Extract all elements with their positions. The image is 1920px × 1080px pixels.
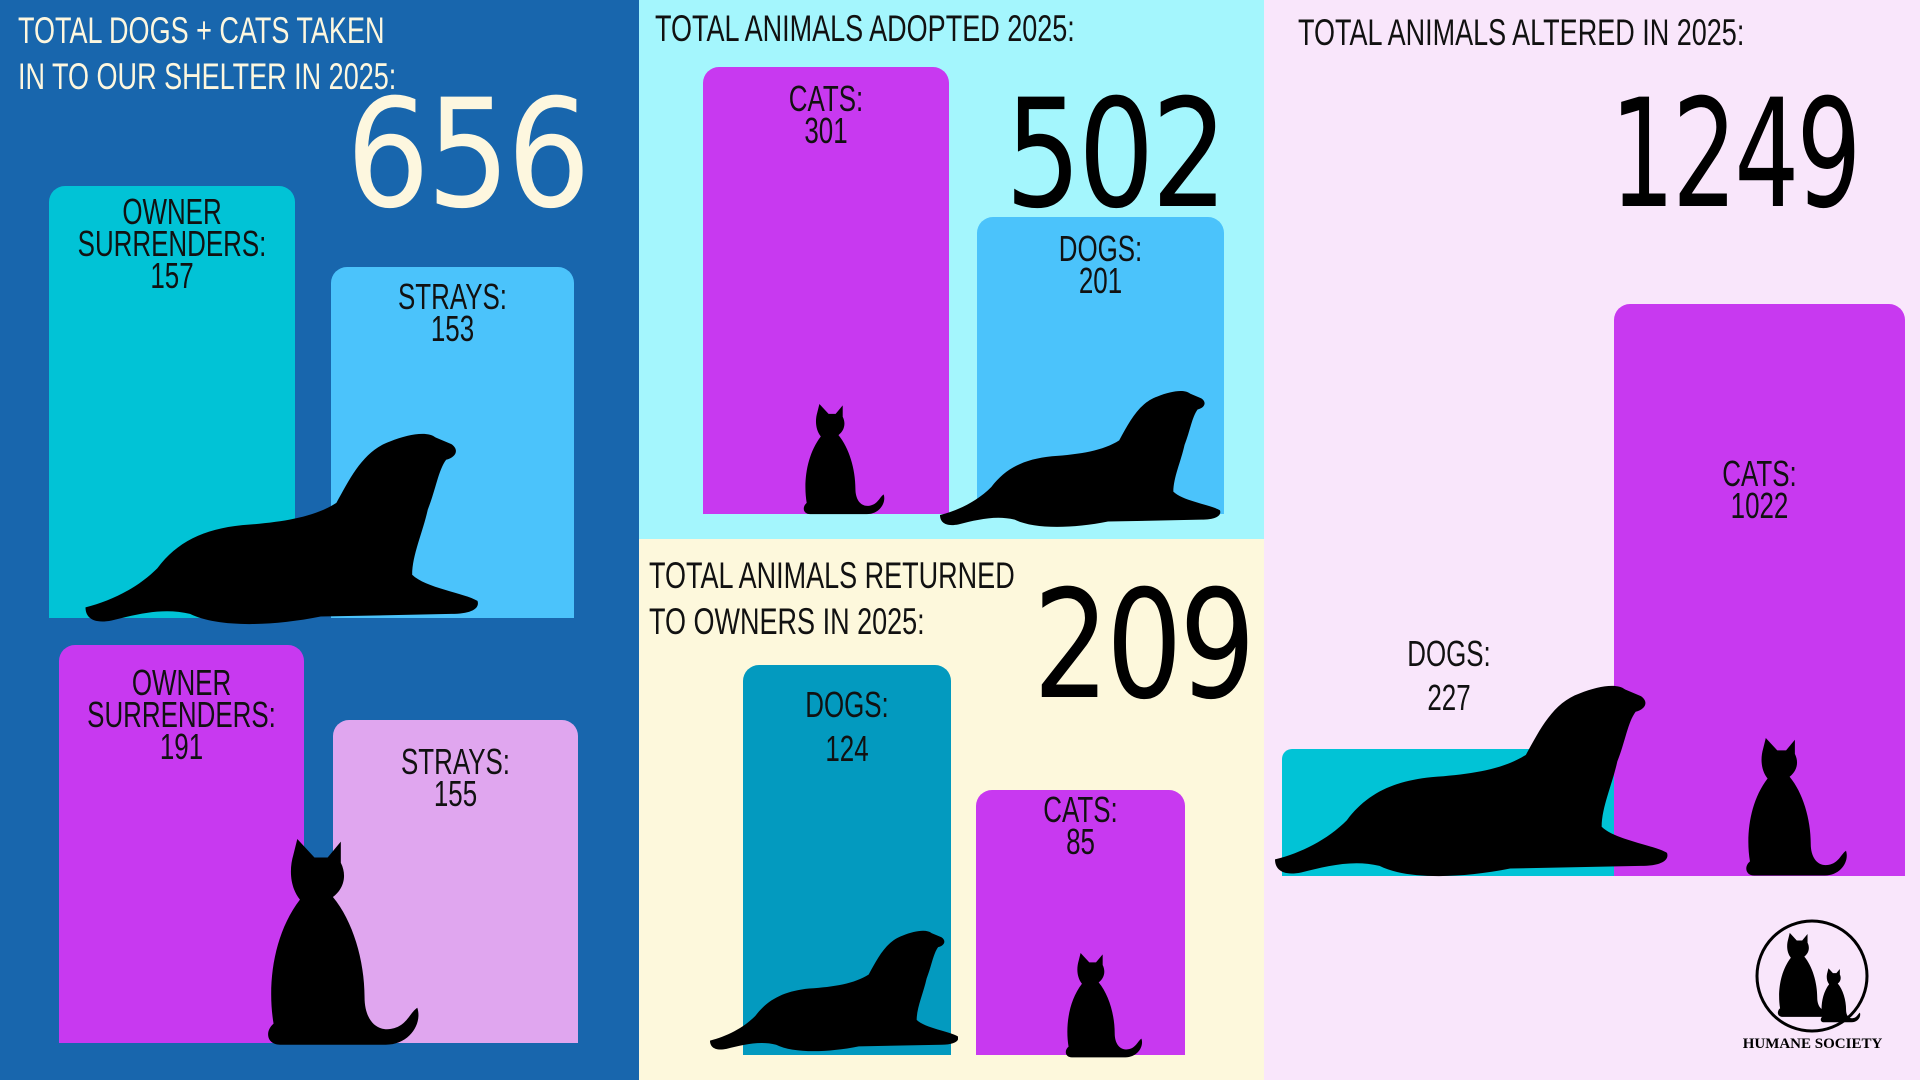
altered total: 1249: [1610, 68, 1859, 242]
bar: dog owner surrenders: 157: [150, 255, 194, 296]
icon: cat: [268, 839, 418, 1045]
panel: intake: [0, 0, 639, 1080]
bar: adopted dogs: DOGS:: [1059, 228, 1142, 269]
bar: dog owner surrenders: OWNER: [122, 191, 222, 232]
label: altered dogs: [1407, 633, 1491, 718]
intake total: 656: [346, 68, 587, 242]
bar: adopted cats: 301: [804, 110, 848, 151]
panel: adopted: [639, 0, 1264, 539]
bar: dog strays: 153: [431, 308, 474, 349]
bar: dog owner surrenders: SURRENDERS:: [78, 223, 266, 264]
bar: dog strays: [331, 267, 574, 618]
icon: cat: [804, 404, 884, 514]
bar: returned dogs: 124: [825, 728, 869, 769]
intake title: [18, 10, 396, 97]
adopted title: TOTAL ANIMALS ADOPTED 2025:: [655, 8, 1075, 49]
bar: cat strays: STRAYS:: [401, 741, 510, 782]
returned title: TOTAL ANIMALS RETURNED: [649, 555, 1015, 596]
bar: adopted cats: [703, 67, 949, 514]
icon: cat: [1066, 953, 1142, 1058]
logo: HUMANE SOCIETY: [1743, 1036, 1882, 1052]
icon: dog: [710, 930, 958, 1052]
bar: returned cats: CATS:: [1043, 789, 1118, 830]
icon: dog: [86, 434, 478, 624]
icon: dog: [1275, 686, 1668, 876]
bar: cat owner surrenders: OWNER: [132, 662, 231, 703]
bar: cat strays: [333, 720, 578, 1043]
bar: cat owner surrenders: 191: [160, 726, 203, 767]
bar: adopted cats: CATS:: [789, 78, 863, 119]
bar: dog strays: STRAYS:: [398, 276, 507, 317]
intake title: TOTAL DOGS + CATS TAKEN: [18, 10, 384, 51]
panel: returned: [639, 539, 1264, 1080]
logo: [1743, 920, 1882, 1052]
bar: returned cats: [976, 790, 1185, 1055]
bar: altered cats: 1022: [1731, 485, 1788, 526]
bar: altered cats: [1614, 304, 1905, 876]
bar: cat strays: 155: [434, 773, 477, 814]
altered title: TOTAL ANIMALS ALTERED IN 2025:: [1298, 12, 1744, 53]
returned title: [649, 555, 1015, 642]
adopted total: 502: [1005, 68, 1224, 242]
icon: cat: [1746, 738, 1847, 876]
bar: adopted dogs: 201: [1079, 260, 1122, 301]
bar: returned dogs: DOGS:: [805, 684, 889, 725]
bar: dog owner surrenders: [49, 186, 295, 618]
bar: altered dogs: [1282, 749, 1632, 876]
bar: cat owner surrenders: SURRENDERS:: [87, 694, 276, 735]
bar: returned dogs: [743, 665, 951, 1055]
icon: dog: [940, 391, 1220, 527]
label: altered dogs: 227: [1427, 677, 1471, 718]
bar: adopted dogs: [977, 217, 1224, 514]
bar: cat owner surrenders: [59, 645, 304, 1043]
label: altered dogs: DOGS:: [1407, 633, 1491, 674]
returned title: TO OWNERS IN 2025:: [649, 601, 925, 642]
panel: altered: [1264, 0, 1920, 1080]
bar: altered cats: CATS:: [1722, 453, 1797, 494]
intake title: IN TO OUR SHELTER IN 2025:: [18, 56, 396, 97]
bar: returned cats: 85: [1066, 821, 1095, 862]
returned total: 209: [1033, 559, 1252, 733]
